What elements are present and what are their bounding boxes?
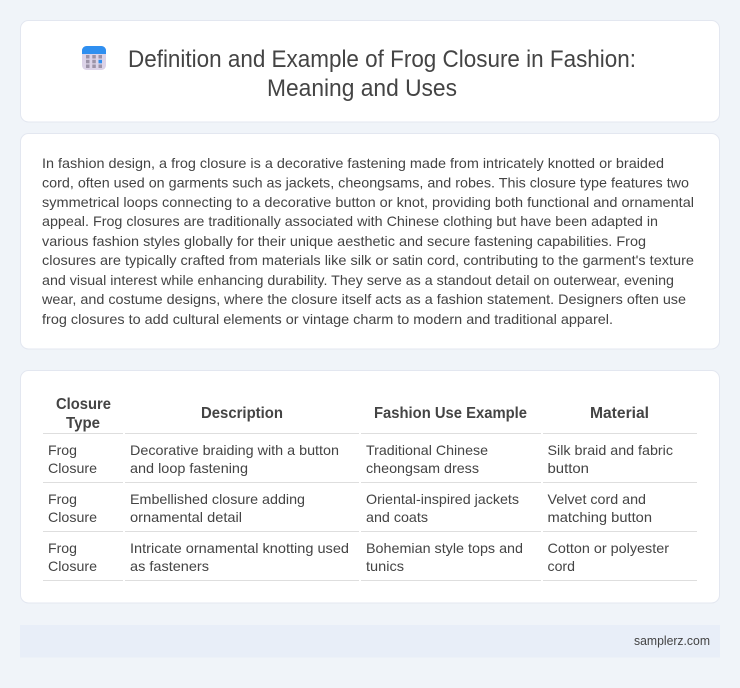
footer bar (20, 625, 720, 658)
table row 3: Closure (48, 558, 97, 574)
icon: calendar (82, 46, 106, 70)
table header row (56, 396, 649, 432)
text block: definition paragraph: frog closures to add cultural elements or vintage charm to modern and traditional apparel. (42, 311, 613, 327)
text block: definition paragraph: various fashion styles globally for their unique aesthetic and secure fastening capabilities. Frog (42, 233, 646, 249)
footer source text: samplerz.com (634, 634, 710, 648)
panel: title card (20, 20, 720, 122)
table row 1 (48, 442, 673, 476)
table header row: Fashion Use Example (374, 405, 527, 422)
table row 2: Oriental-inspired jackets (366, 491, 519, 507)
title (128, 46, 636, 102)
table row 2: Closure (48, 509, 97, 525)
table row 1: button (548, 460, 589, 476)
text block: definition paragraph: closures are typically crafted from materials like silk or satin cord, contributing to the garment's texture (42, 252, 694, 268)
table row 2: matching button (548, 509, 652, 525)
title: Definition and Example of Frog Closure in Fashion: (128, 46, 636, 73)
table row 3: Intricate ornamental knotting used (130, 540, 349, 556)
table row 1: Decorative braiding with a button (130, 442, 339, 458)
text block: definition paragraph (41, 155, 694, 327)
table row 3: tunics (366, 558, 404, 574)
table row 3 (48, 540, 669, 574)
table row 3: cord (548, 558, 575, 574)
panel: definition text (20, 134, 720, 349)
text block: definition paragraph: symmetrical loops connecting to a decorative button or knot, providing both functional and ornamental (42, 194, 694, 210)
table row 3: Bohemian style tops and (366, 540, 523, 556)
table row 3: Frog (48, 540, 77, 556)
table row 2: Velvet cord and (548, 491, 646, 507)
table row 1: and loop fastening (130, 460, 248, 476)
table row 2: Embellished closure adding (130, 491, 305, 507)
text block: definition paragraph: In fashion design, a frog closure is a decorative fastening made from intricately knotted or braided (42, 155, 664, 171)
table row 1: cheongsam dress (366, 460, 479, 476)
text block: definition paragraph: cord, often used on garments such as jackets, cheongsams, and robes. This closure type features two (42, 174, 689, 190)
table row 1: Closure (48, 460, 97, 476)
table header row: Description (201, 405, 283, 422)
table row 1: Traditional Chinese (366, 442, 488, 458)
panel: comparison table (20, 370, 720, 603)
text block: definition paragraph: wear, and costume designs, where the closure itself acts as a fashion statement. Designers often use (41, 291, 686, 307)
table row 2: and coats (366, 509, 428, 525)
table row 3: as fasteners (130, 558, 209, 574)
table header row: Closure (56, 396, 111, 413)
table header row: Material (590, 405, 649, 422)
table row 1: Frog (48, 442, 77, 458)
table header row: Type (66, 415, 100, 432)
table row 2: ornamental detail (130, 509, 242, 525)
table row 1: Silk braid and fabric (548, 442, 673, 458)
text block: definition paragraph: appeal. Frog closures are traditionally associated with Chinese clothing but have been adapted in (42, 213, 658, 229)
text block: definition paragraph: and visual interest while enhancing durability. They serve as a standout detail on outerwear, evening (42, 272, 674, 288)
table row 2 (48, 491, 652, 525)
table row 2: Frog (48, 491, 77, 507)
title: Meaning and Uses (267, 75, 457, 102)
table row 3: Cotton or polyester (548, 540, 669, 556)
